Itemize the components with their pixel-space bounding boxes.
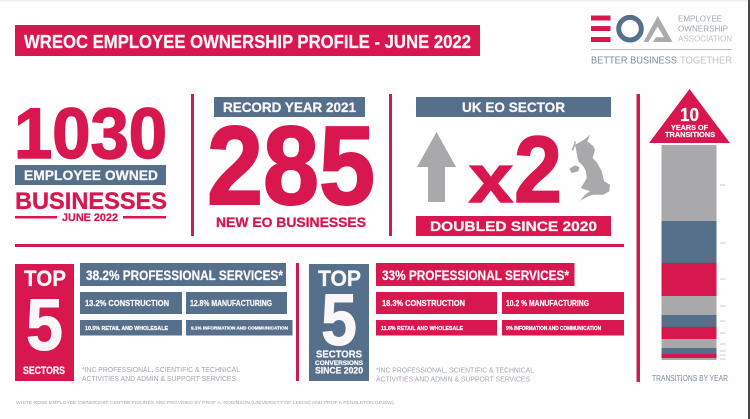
title banner: WREOC EMPLOYEE OWNERSHIP PROFILE - JUNE 2022 bbox=[24, 32, 471, 52]
logo: Employee Ownership Association: ASSOCIATION bbox=[678, 34, 732, 44]
panel: transitions by year chart bbox=[649, 89, 730, 383]
bar: 11.6% retail and wholesale bbox=[376, 320, 497, 336]
bar: 12.8% manufacturing: 12.8% MANUFACTURING bbox=[190, 298, 272, 308]
year labels: 2019 bbox=[720, 278, 726, 281]
logo: Employee Ownership Association: OWNERSHIP bbox=[678, 24, 728, 34]
footnote: ACTIVITIES AND ADMIN & SUPPORT SERVICES bbox=[82, 376, 236, 383]
badge: top 5 sectors: TOP bbox=[24, 266, 66, 291]
year labels: 2021 bbox=[720, 184, 726, 187]
badge: top 5 sectors conversions since 2020: CONVERSIONS bbox=[315, 361, 363, 367]
footnote: *INC PROFESSIONAL, SCIENTIFIC & TECHNICAL bbox=[376, 368, 534, 374]
label: employee owned bbox=[15, 165, 166, 185]
bar: 9.1% information and communication bbox=[186, 320, 292, 336]
logo: Employee Ownership Association: BETTER BUSINESS bbox=[591, 56, 677, 67]
big number 1030: 1030 bbox=[14, 95, 167, 174]
year labels: 2020 bbox=[720, 242, 726, 245]
source line: WHITE ROSE EMPLOYEE OWNERSHIP CENTRE FIGURES ARE PROVIDED BY PROF A. ROBINSON (UNIVERSITY OF LEEDS) AND PROF A PENDLETON (UNSW). bbox=[16, 400, 395, 406]
bar: 13.2% construction: 13.2% CONSTRUCTION bbox=[85, 298, 169, 308]
bar: 38.2% professional services bbox=[80, 263, 286, 286]
bar: 10.2% manufacturing bbox=[502, 292, 624, 314]
badge: top 5 sectors conversions since 2020: TOP bbox=[318, 266, 361, 291]
panel: top 5 sectors bbox=[15, 263, 292, 383]
triangle heading: 10 years of transitions: 10 bbox=[680, 105, 699, 125]
icon: up arrow bbox=[417, 132, 456, 202]
big number 285: 285 bbox=[207, 104, 375, 228]
bar: 9% information and communication bbox=[502, 320, 624, 336]
logo: Employee Ownership Association: EMPLOYEE bbox=[678, 14, 722, 24]
label: new EO businesses: NEW EO BUSINESSES bbox=[216, 214, 366, 230]
bar: 13.2% construction bbox=[80, 292, 182, 314]
logo: Employee Ownership Association: TOGETHER bbox=[680, 56, 732, 67]
panel: UK EO sector bbox=[416, 97, 611, 236]
bar: 18.3% construction bbox=[376, 292, 497, 314]
stat: x2: 2 bbox=[514, 117, 562, 223]
panel: record year 2021 bbox=[207, 97, 375, 230]
heading: UK EO sector bbox=[416, 97, 611, 117]
year labels: 2016 bbox=[720, 332, 726, 335]
banner: doubled since 2020 bbox=[416, 216, 611, 236]
footnote bbox=[82, 367, 240, 383]
year labels: 2015 bbox=[720, 343, 726, 346]
bar: 33% professional services: 33% PROFESSIONAL SERVICES* bbox=[382, 268, 570, 283]
year labels: 2012 bbox=[720, 358, 726, 361]
year labels: 2014 bbox=[720, 350, 726, 353]
bar: 12.8% manufacturing bbox=[186, 292, 287, 314]
bar: 11.6% retail and wholesale: 11.6% RETAIL AND WHOLESALE bbox=[381, 326, 463, 332]
badge: top 5 sectors bbox=[15, 264, 74, 381]
icon: UK map bbox=[569, 135, 610, 201]
label: June 2022: JUNE 2022 bbox=[62, 212, 118, 224]
year labels bbox=[720, 184, 726, 361]
heading: record year 2021: RECORD YEAR 2021 bbox=[223, 99, 356, 115]
footnote: ACTIVITIES AND ADMIN & SUPPORT SERVICES bbox=[376, 376, 530, 384]
badge: top 5 sectors conversions since 2020: SECTORS bbox=[316, 350, 362, 360]
caption: transitions by year: TRANSITIONS BY YEAR bbox=[652, 374, 728, 383]
badge: top 5 sectors conversions since 2020: 5 bbox=[321, 280, 357, 361]
bar: 33% professional services bbox=[376, 263, 574, 286]
label: businesses: BUSINESSES bbox=[15, 188, 167, 215]
footnote bbox=[376, 368, 534, 384]
bar: 10.5% retail and wholesale: 10.5% RETAIL AND WHOLESALE bbox=[85, 326, 168, 332]
triangle heading: 10 years of transitions bbox=[649, 89, 730, 143]
year labels: 2013 bbox=[720, 354, 726, 357]
badge: top 5 sectors conversions since 2020: SINCE 2020 bbox=[315, 366, 363, 376]
badge: top 5 sectors: SECTORS bbox=[23, 365, 65, 377]
bar: 9% information and communication: 9% INFORMATION AND COMMUNICATION bbox=[506, 326, 601, 332]
panel: 1030 employee owned businesses bbox=[14, 95, 167, 224]
logo: Employee Ownership Association bbox=[591, 14, 732, 67]
year labels: 2018 bbox=[720, 305, 726, 308]
bar: 10.2% manufacturing: 10.2 % MANUFACTURING bbox=[506, 298, 589, 308]
triangle heading: 10 years of transitions: TRANSITIONS bbox=[665, 132, 715, 139]
panel: top 5 sectors conversions since 2020 bbox=[309, 263, 624, 384]
banner: doubled since 2020: DOUBLED SINCE 2020 bbox=[430, 218, 597, 234]
badge: top 5 sectors: 5 bbox=[26, 285, 63, 366]
bar: 38.2% professional services: 38.2% PROFESSIONAL SERVICES* bbox=[86, 268, 284, 283]
stacked bar bbox=[662, 145, 716, 360]
badge: top 5 sectors conversions since 2020 bbox=[309, 264, 369, 381]
label: employee owned: EMPLOYEE OWNED bbox=[24, 168, 158, 183]
bar: 18.3% construction: 18.3% CONSTRUCTION bbox=[382, 298, 465, 308]
heading: UK EO sector: UK EO SECTOR bbox=[462, 99, 565, 115]
bar: 10.5% retail and wholesale bbox=[80, 320, 182, 336]
stat: x2 bbox=[469, 117, 562, 223]
year labels: 2017 bbox=[720, 320, 726, 323]
stat: x2: x bbox=[469, 141, 513, 217]
title banner bbox=[15, 25, 480, 56]
bar: 9.1% information and communication: 9.1% INFORMATION AND COMMUNICATION bbox=[191, 326, 288, 330]
triangle heading: 10 years of transitions: YEARS OF bbox=[671, 125, 709, 132]
footnote: *INC PROFESSIONAL, SCIENTIFIC & TECHNICAL bbox=[82, 367, 240, 374]
